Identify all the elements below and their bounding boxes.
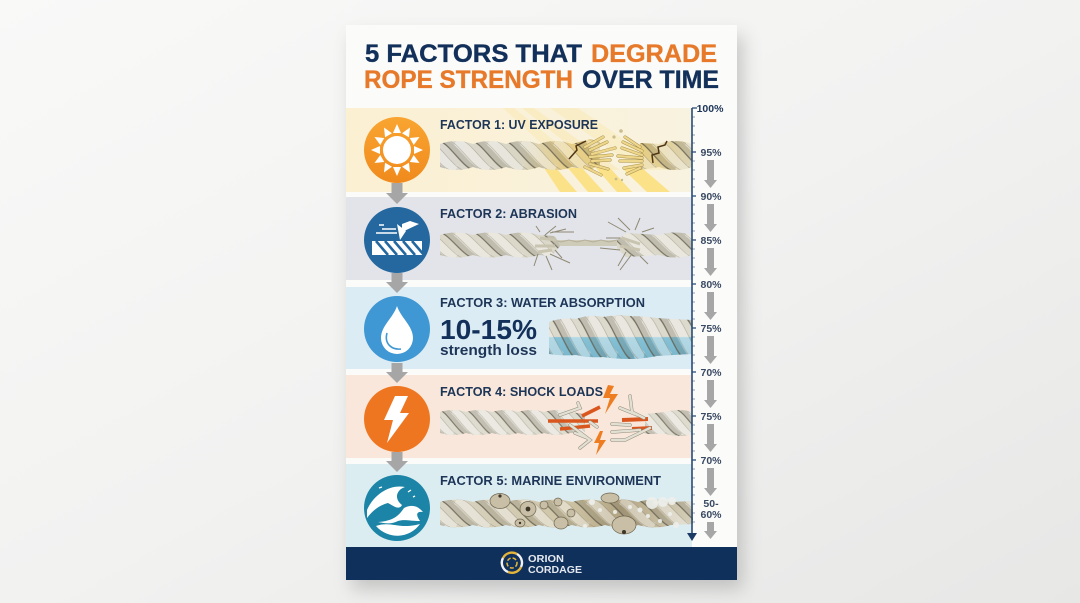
poster shadow: [352, 36, 743, 589]
icon: lightning bolt: [364, 386, 430, 452]
label: factor 2: FACTOR 2: ABRASION: [440, 206, 577, 221]
title: DEGRADE: [591, 40, 717, 68]
rope: UV damaged: [440, 129, 692, 181]
panel: factor 2 abrasion: [346, 197, 692, 280]
arrow: factor 4 to 5: [386, 452, 408, 472]
scale labels: [697, 103, 724, 521]
stat: strength loss: 10-15%: [440, 314, 537, 345]
scale labels: 80%: [700, 279, 722, 291]
rope: abraded: [440, 218, 692, 270]
icon: waves: [364, 475, 430, 541]
title: OVER TIME: [582, 66, 719, 94]
poster: [346, 25, 737, 580]
icon: water drop: [364, 296, 430, 362]
icon: Orion Cordage logo: [502, 553, 522, 573]
panel: factor 5 marine environment: [346, 464, 693, 547]
title: 5 FACTORS THAT: [365, 40, 582, 68]
label: factor 1: FACTOR 1: UV EXPOSURE: [440, 117, 598, 132]
label: factor 4: FACTOR 4: SHOCK LOADS: [440, 384, 603, 399]
rope: wet: [549, 315, 692, 359]
sun rays: [503, 108, 670, 192]
icon: sun: [364, 117, 430, 183]
scale labels: 75%: [700, 323, 722, 335]
arrow: factor 1 to 2: [386, 183, 408, 204]
scale labels: 70%: [700, 455, 722, 467]
logo text: ORION: [528, 554, 564, 565]
scale labels: 75%: [700, 411, 722, 423]
panel: factor 3 water absorption: [346, 287, 692, 369]
logo text: CORDAGE: [528, 565, 582, 576]
label: factor 3: FACTOR 3: WATER ABSORPTION: [440, 295, 645, 310]
stat: strength loss: strength loss: [440, 343, 537, 359]
arrow: factor 2 to 3: [386, 273, 408, 293]
title: [364, 40, 719, 94]
footer: [346, 547, 737, 580]
icon: abrasion: [364, 207, 430, 273]
scale labels: 95%: [700, 147, 722, 159]
rope: shock break: [440, 385, 692, 455]
stat: strength loss: [440, 314, 537, 359]
strength scale axis: [687, 108, 697, 541]
label: factor 5: FACTOR 5: MARINE ENVIRONMENT: [440, 473, 661, 488]
arrow: factor 3 to 4: [386, 363, 408, 383]
scale labels: 50-: [703, 498, 719, 510]
rope: marine fouled: [440, 493, 693, 534]
logo text: [528, 554, 582, 576]
scale labels: 70%: [700, 367, 722, 379]
scale labels: 100%: [697, 103, 724, 115]
scale labels: 85%: [700, 235, 722, 247]
scale arrows: [704, 160, 717, 539]
scale labels: 90%: [700, 191, 722, 203]
scale labels: 60%: [700, 509, 722, 521]
panel: factor 4 shock loads: [346, 375, 692, 458]
title: ROPE STRENGTH: [364, 66, 573, 94]
panel: factor 1 UV exposure: [346, 108, 692, 192]
